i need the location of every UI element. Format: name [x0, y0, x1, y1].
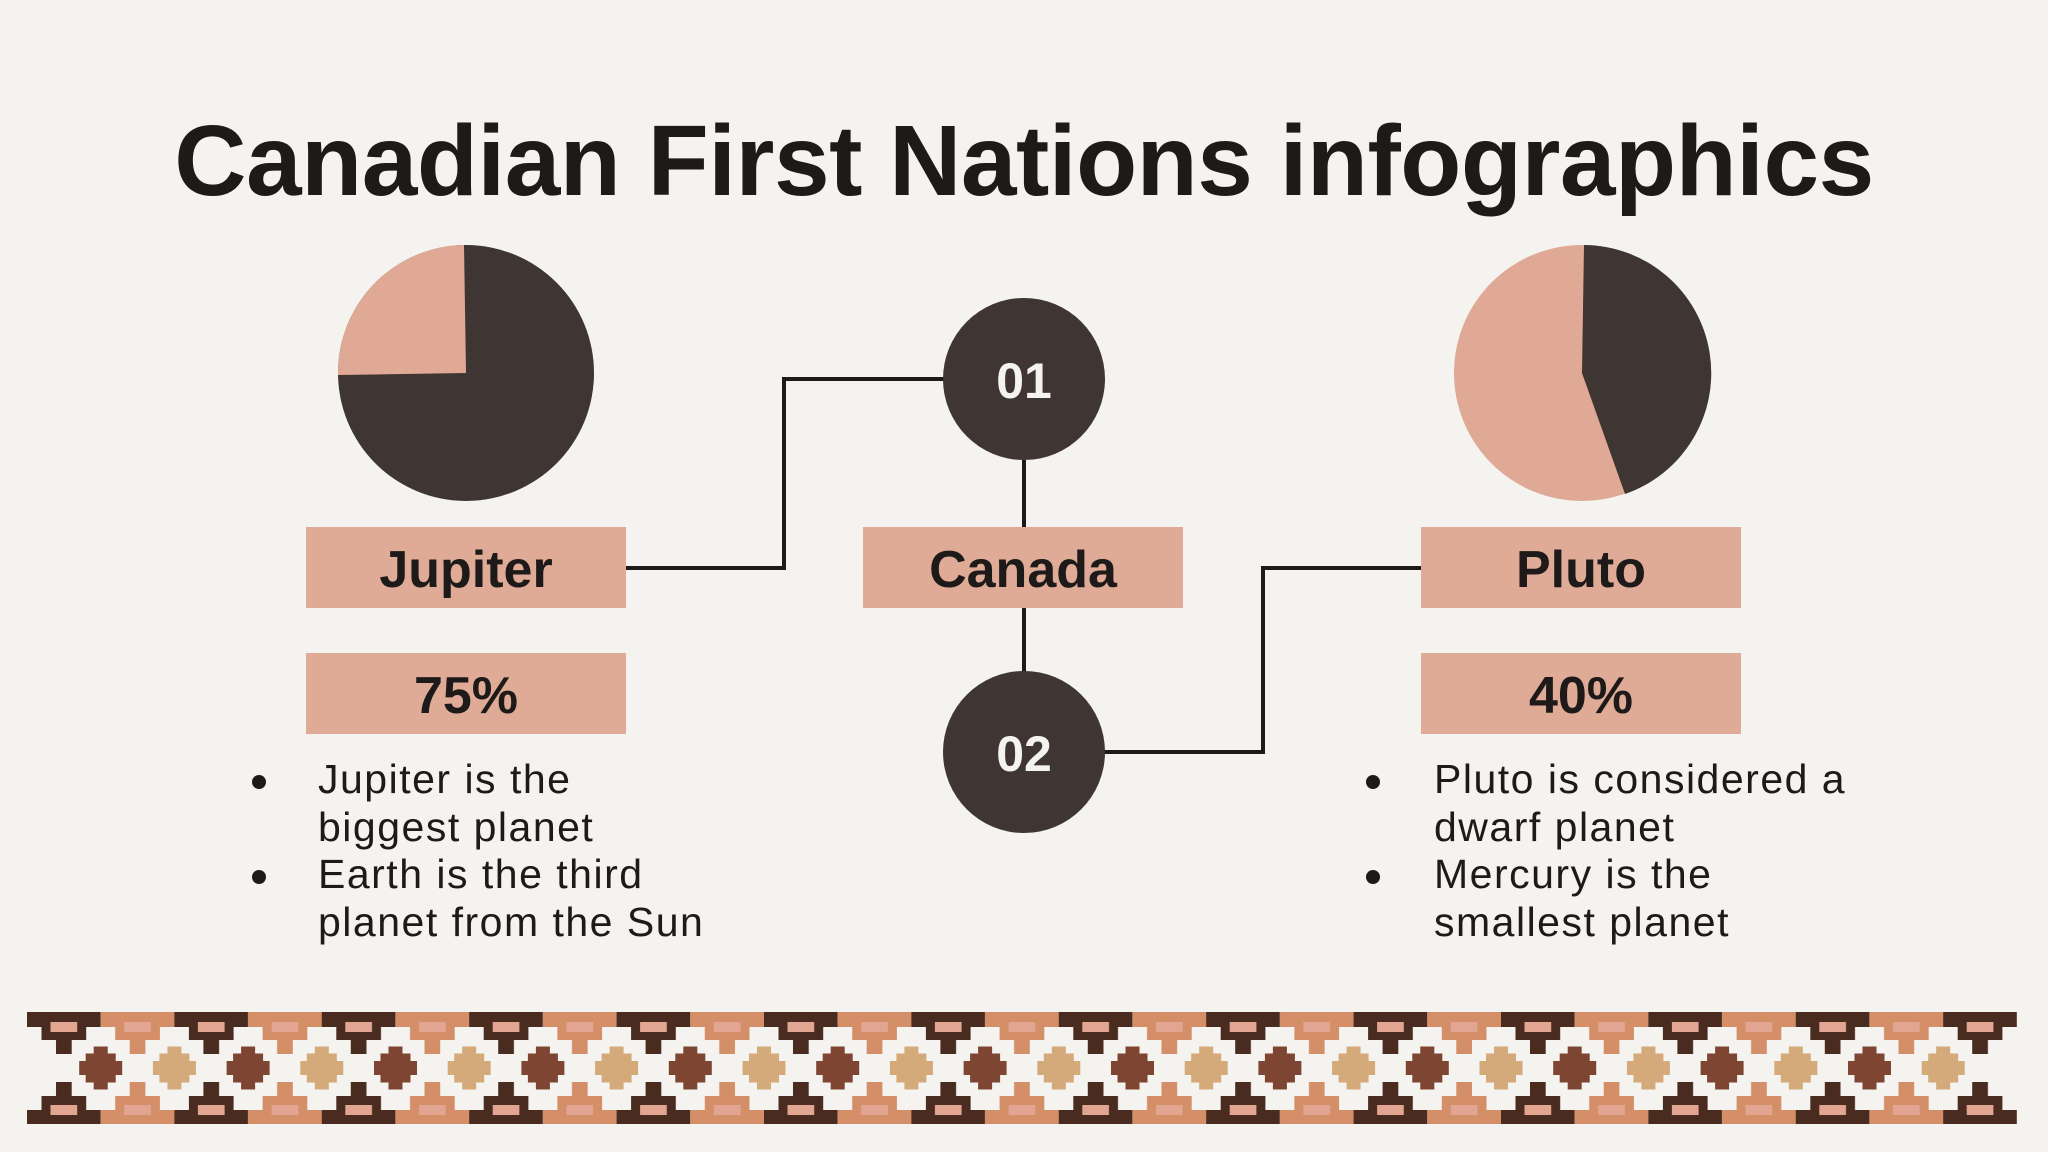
- bullet list: Jupiter: Earth is the third: [318, 851, 644, 897]
- label box: Canada: [863, 527, 1183, 608]
- bullet list: Pluto: Mercury is the: [1434, 851, 1712, 897]
- pie chart: Pluto 40%: [1454, 245, 1711, 501]
- value box: 40%: 40%: [1529, 667, 1633, 725]
- label box: Canada: Canada: [929, 541, 1118, 599]
- bullet list: Pluto: [1366, 756, 1846, 945]
- value box: 40%: [1421, 653, 1741, 734]
- circle 01: 01: [996, 353, 1052, 409]
- bullet list: Pluto: dwarf planet: [1434, 804, 1675, 850]
- label box: Jupiter: Jupiter: [379, 541, 553, 599]
- title: Canadian First Nations infographics: [174, 105, 1874, 217]
- bullet list: Jupiter: biggest planet: [318, 804, 594, 850]
- circle 02: [943, 671, 1105, 833]
- circle 01: [943, 298, 1105, 460]
- bullet list: Jupiter: planet from the Sun: [318, 899, 704, 945]
- value box: 75%: [306, 653, 626, 734]
- label box: Pluto: Pluto: [1516, 541, 1646, 599]
- value box: 75%: 75%: [414, 667, 518, 725]
- label box: Pluto: [1421, 527, 1741, 608]
- decorative border pattern: [27, 1012, 2017, 1124]
- circle 02: 02: [996, 726, 1052, 782]
- label box: Jupiter: [306, 527, 626, 608]
- pie chart: Jupiter 75%: [338, 245, 594, 501]
- connector lines: [626, 379, 1421, 752]
- bullet list: Pluto: smallest planet: [1434, 899, 1730, 945]
- bullet list: Jupiter: Jupiter is the: [318, 756, 571, 802]
- bullet list: Jupiter: [252, 756, 704, 945]
- bullet list: Pluto: Pluto is considered a: [1434, 756, 1846, 802]
